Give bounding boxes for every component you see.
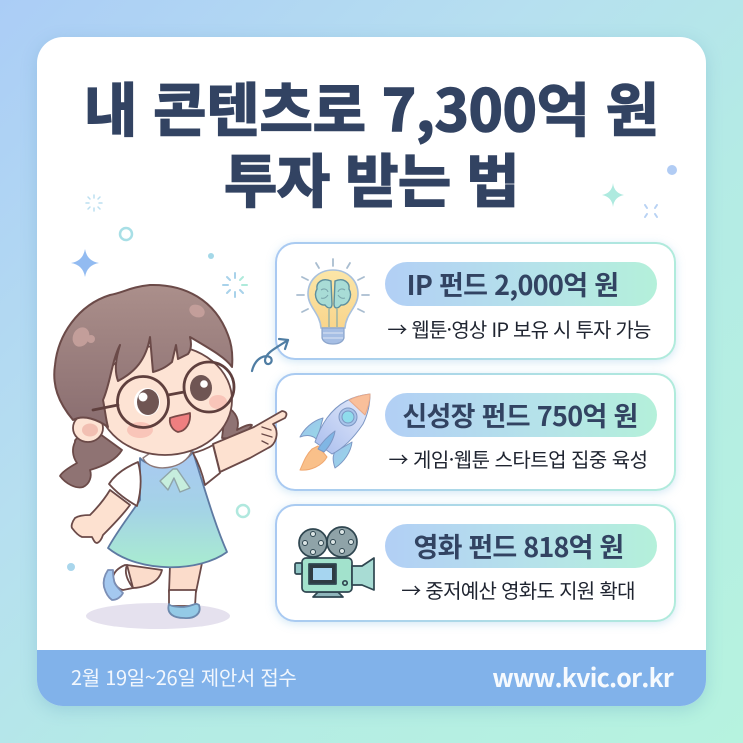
back sock [113,565,133,590]
front sock [169,590,196,606]
card: new growth fund [275,373,676,491]
dress [108,452,227,567]
hair highlights [70,302,207,349]
right braid [222,406,252,438]
front shoe [168,604,200,618]
character: girl pointing [54,285,286,629]
hair [54,285,232,427]
sub text: film fund: → 중저예산 영화도 지원 확대 [401,575,635,604]
pill heading: film fund [385,524,657,568]
arrow: curly [252,339,288,371]
right sleeve [193,445,220,485]
front leg [169,563,202,592]
icon: light bulb with brain [297,259,369,344]
title: 내 콘텐츠로 7,300억 원 [84,64,659,148]
decorative burst: upper right [645,205,657,217]
title [84,64,659,219]
collar [143,446,192,468]
pill heading: IP fund: IP 펀드 2,000억 원 [407,264,618,303]
decorative burst: upper left [86,195,102,211]
glasses [93,362,234,428]
decorative burst: centre [223,273,247,297]
footer band [37,650,706,706]
sub text: new growth fund: → 게임·웹툰 스타트업 집중 육성 [389,444,647,473]
left sleeve [109,462,141,506]
left braid [60,434,122,487]
decorative ring lower [237,505,249,517]
footer text: submission dates: 2월 19일~26일 제안서 접수 [71,662,297,691]
right arm [213,411,286,472]
left arm [72,490,130,543]
ear [73,414,103,442]
card: film fund [275,504,676,622]
eyes [134,375,212,416]
back shoe [104,570,123,600]
mouth [170,413,190,432]
pill heading: film fund: 영화 펀드 818억 원 [414,526,623,565]
decorative ring top [120,228,132,240]
ear inner [82,424,98,436]
sub text: IP fund: → 웹툰·영상 IP 보유 시 투자 가능 [387,314,651,343]
footer text: website: www.kvic.or.kr [492,659,673,695]
title: 투자 받는 법 [224,135,519,219]
pill heading: new growth fund: 신성장 펀드 750억 원 [402,395,638,434]
icon: blue sparkle [71,249,99,277]
back leg [127,565,162,588]
character shadow [86,603,230,629]
cheeks [127,395,227,438]
ribbon bow [160,469,190,492]
icon: rocket [300,394,370,470]
pill heading: IP fund [385,262,657,306]
icon: film camera [295,527,374,597]
face [98,345,232,455]
icon: mint sparkle [602,183,624,207]
decorative dots [67,165,677,571]
card: IP fund [275,242,676,360]
